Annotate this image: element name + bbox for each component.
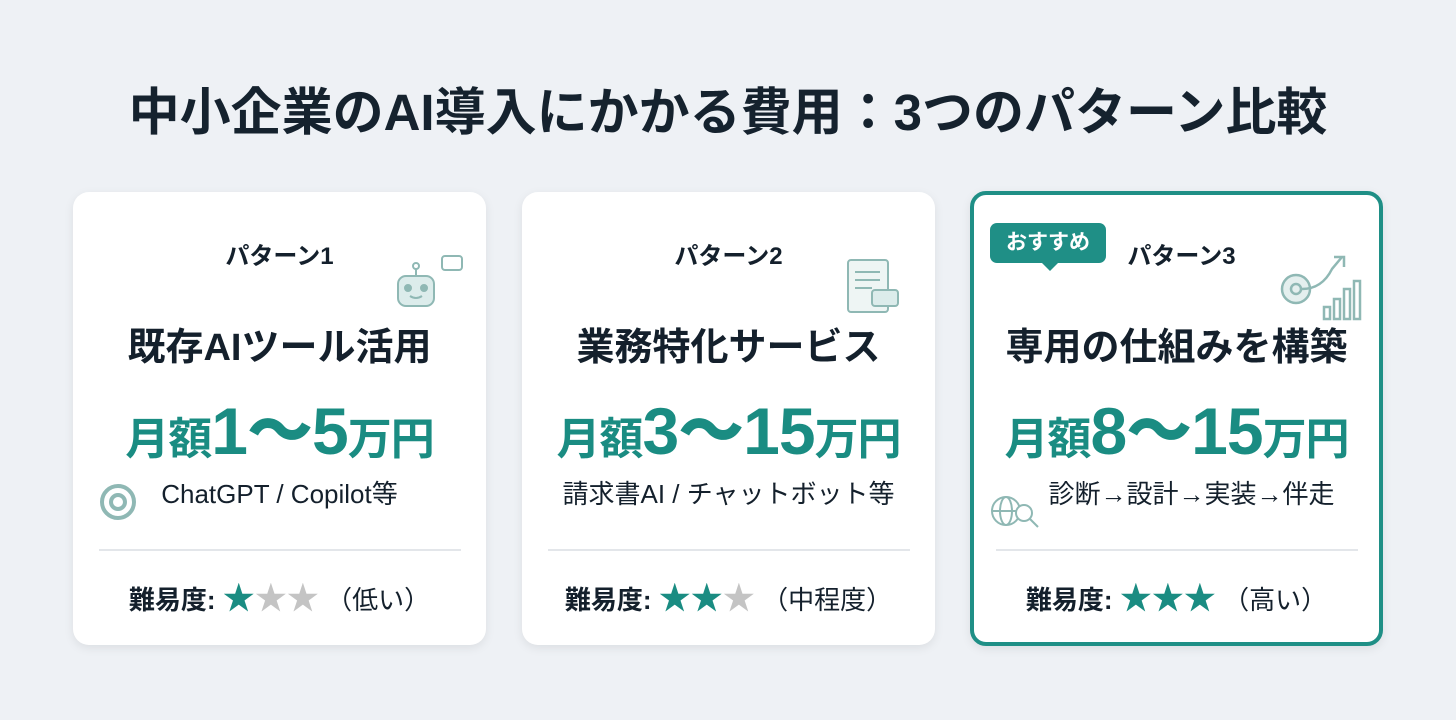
badge: recommended: おすすめ (1006, 231, 1090, 254)
title: 中小企業のAI導入にかかる費用：3つのパターン比較 (129, 84, 1327, 141)
panel: pattern 3 (recommended) (970, 191, 1383, 646)
panel: pattern 1 (73, 192, 486, 645)
icon: gear and chart (1280, 256, 1362, 320)
difficulty 2: 難易度: ★★★ （中程度） (565, 580, 892, 616)
text: パターン2 (674, 243, 783, 270)
text: 月額8～15万円 (1004, 394, 1349, 468)
text: パターン1 (225, 243, 334, 270)
difficulty 1: 難易度: ★★★ （低い） (129, 580, 430, 616)
icon: chatgpt logo (100, 484, 136, 520)
icon: document (847, 259, 899, 313)
text: 専用の仕組みを構築 (1005, 327, 1348, 369)
difficulty 3: 難易度: ★★★ （高い） (1026, 580, 1327, 616)
text: ChatGPT / Copilot等 (161, 479, 398, 509)
icon: robot (397, 255, 463, 307)
text: 月額3～15万円 (556, 394, 901, 468)
badge: recommended (990, 223, 1106, 263)
panel: pattern 2 (522, 192, 935, 645)
text: 診断→設計→実装→伴走 (1048, 479, 1334, 509)
text: 月額1～5万円 (125, 394, 434, 468)
icon: globe search (991, 496, 1039, 528)
text: 業務特化サービス (576, 327, 880, 369)
text: 既存AIツール活用 (127, 327, 432, 369)
text: パターン3 (1127, 243, 1236, 270)
text: 請求書AI / チャットボット等 (562, 479, 894, 509)
